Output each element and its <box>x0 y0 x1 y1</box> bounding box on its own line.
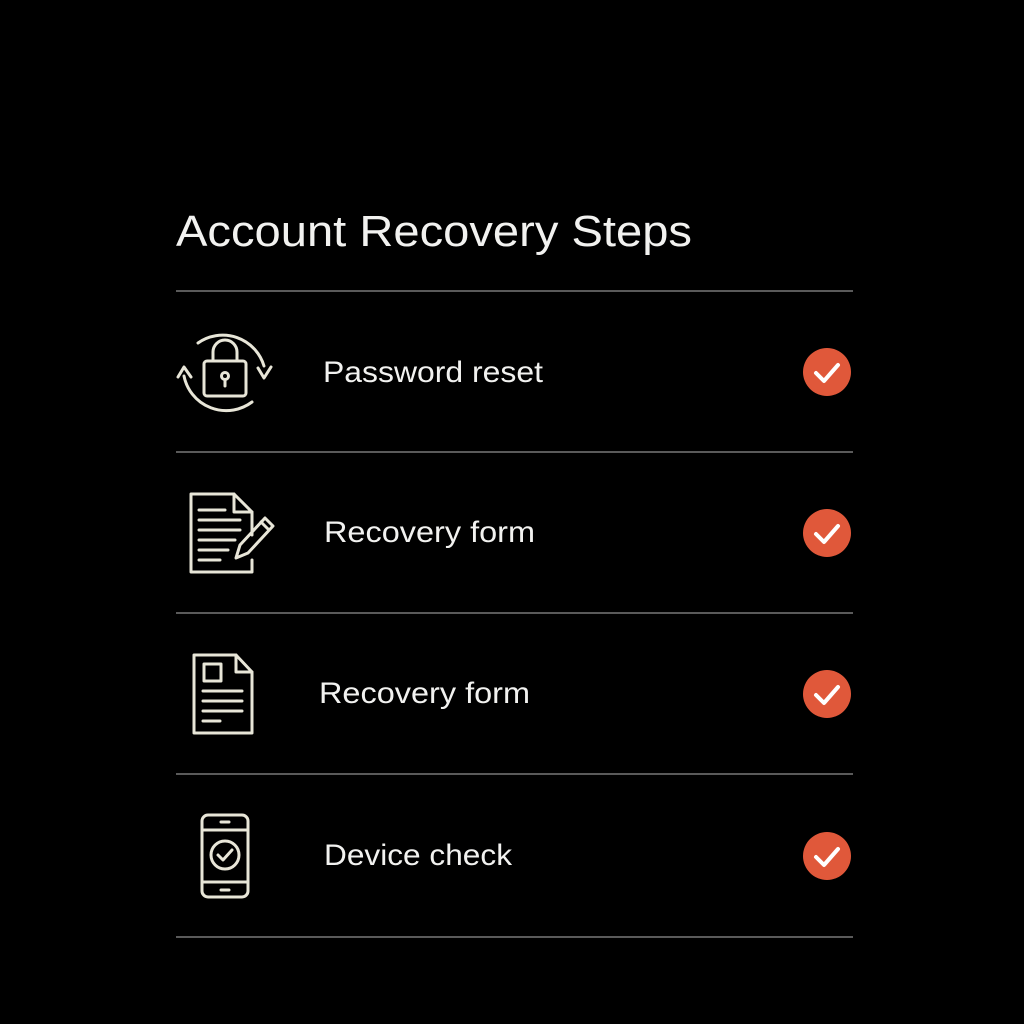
icon: lock with rotating arrows <box>178 335 271 411</box>
row: device check <box>202 815 851 897</box>
icon: phone with check <box>202 815 248 897</box>
title: Account Recovery Steps <box>176 207 692 256</box>
row: recovery form 1 <box>191 494 851 572</box>
row: recovery form 2 <box>194 655 851 733</box>
label: Password reset <box>323 356 544 389</box>
check badge <box>803 509 851 557</box>
check badge <box>803 670 851 718</box>
icon: document with pencil <box>191 494 273 572</box>
label: Device check <box>324 839 513 872</box>
row: password reset <box>178 335 851 411</box>
label: Recovery form <box>319 677 530 710</box>
check badge <box>803 348 851 396</box>
label: Recovery form <box>324 516 535 549</box>
check badge <box>803 832 851 880</box>
icon: document <box>194 655 252 733</box>
